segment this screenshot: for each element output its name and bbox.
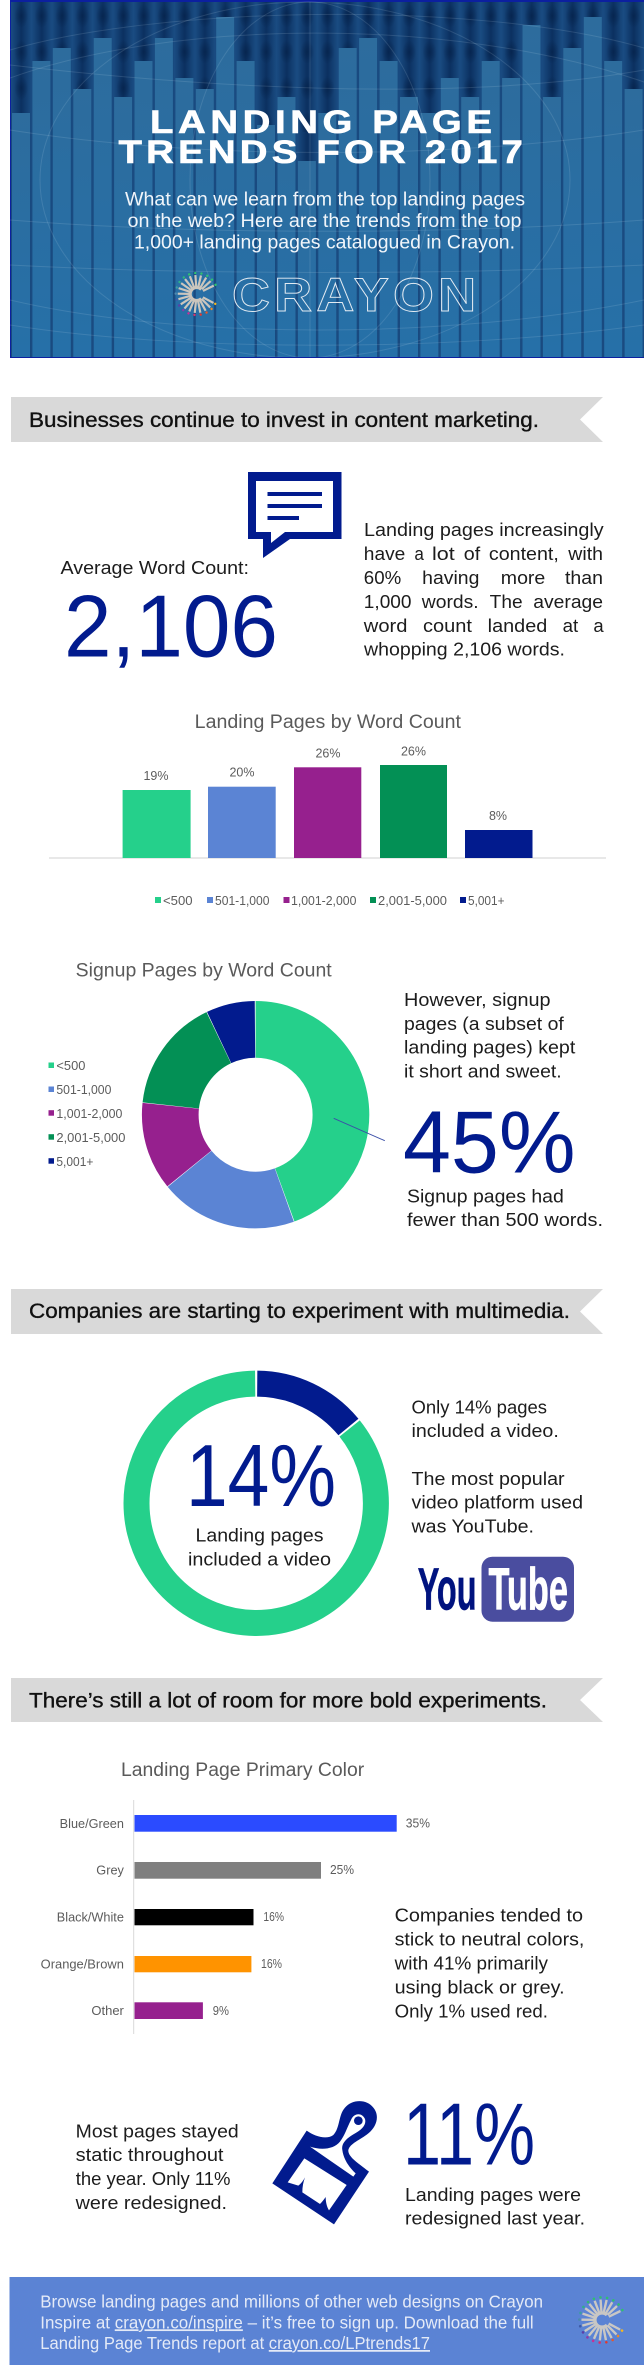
text block: neutral colors: Companies tended to [395,1905,583,1926]
bar: other: 9% [213,2004,229,2018]
icon: YouTube logo: You [418,1556,476,1622]
chart legend: 501-1,000 [215,894,270,908]
bar: 1,001-2,000 [294,747,361,858]
footer text [40,2292,543,2353]
text block: word count explanation: word [363,615,407,636]
chart legend: 1,001-2,000 [291,894,356,908]
section heading: bold experiments: There’s still a lot of room for more bold experiments. [29,1690,547,1712]
chart title: Landing Pages by Word Count [195,712,462,733]
stat: 11 percent [403,2084,585,2229]
icon: paintbrush [272,2101,377,2224]
text block: static pages: the year. Only 11% [76,2168,230,2189]
text block: video: Only 14% pages [412,1396,547,1417]
text block: signup pages: pages (a subset of [404,1013,565,1034]
text block: word count explanation: whopping 2,106 words. [363,638,565,660]
bar: under 500 [123,769,191,858]
donut legend: 5,001+ [56,1155,93,1169]
text block: word count explanation: landed [488,615,547,636]
donut legend: 501-1,000 [56,1083,111,1097]
text block: word count explanation: a [414,543,425,564]
bar: orange/brown: 16% [261,1957,282,1971]
donut segments [170,1029,341,1200]
bar: black/white: 16% [263,1910,284,1924]
ring chart: pages with video [137,1384,376,1623]
section heading: bold experiments [11,1678,603,1722]
bar: 2,001-5,000 [380,745,447,858]
text block: video: The most popular [412,1468,565,1489]
chart legend: 5,001+ [468,894,504,908]
banner title: TRENDS FOR 2017 [118,135,523,170]
ring chart: pages with video: Landing pages [196,1525,324,1546]
text block: word count explanation: having [422,567,479,588]
donut legend: 2,001-5,000 [56,1131,125,1145]
footer text: Landing Page Trends report at crayon.co/LPtrends17 [40,2333,430,2353]
footer panel [10,2277,644,2365]
stat: 45 percent: 45% [403,1093,576,1192]
text block: signup pages: landing pages) kept [404,1036,575,1058]
wordmark: CRAYON [232,269,476,321]
text block: word count explanation [363,519,604,660]
stat: 11 percent: 11% [403,2084,535,2183]
bar chart: landing pages by word count [49,712,606,908]
text block: word count explanation: Landing pages increasingly [364,519,604,540]
banner intro text: What can we learn from the top landing pages [125,190,525,210]
banner title [118,105,523,170]
icon: speech bubble [248,472,342,558]
bar: 501-1,000 [208,766,276,858]
donut chart: signup pages by word count [48,961,385,1200]
text block: word count explanation: 60% [364,567,401,588]
text block: word count explanation: The [490,591,523,612]
icon: footer starburst [578,2296,624,2344]
section heading: multimedia [11,1289,603,1334]
text block: signup pages [404,989,575,1082]
stat: 45 percent [403,1093,603,1230]
bar: other: Other [91,2004,124,2018]
bar: 5,001+: 8% [489,809,507,823]
bar: orange/brown [41,1956,282,1972]
callout line [334,1118,385,1141]
text block: word count explanation: than [565,567,603,588]
text block: word count explanation: content, [489,543,559,564]
stat: 45 percent: Signup pages had [407,1186,564,1206]
text block: static pages: were redesigned. [75,2192,227,2213]
stat: 45 percent: fewer than 500 words. [407,1209,603,1230]
text block: neutral colors: with 41% primarily [394,1953,549,1974]
donut legend: 1,001-2,000 [56,1107,122,1121]
text block: neutral colors: using black or grey. [395,1976,565,1997]
stat: 11 percent: redesigned last year. [405,2208,585,2229]
text block: word count explanation: a [593,615,604,636]
text block: video [410,1396,583,1536]
bar: other [91,2002,229,2019]
bar: grey: 25% [330,1863,354,1877]
text block: video: included a video. [412,1420,559,1441]
bar: blue/green [60,1815,430,1832]
text block: static pages: Most pages stayed [76,2120,239,2141]
bar: black/white [57,1909,284,1925]
icon: Crayon starburst [174,272,217,316]
ring chart: pages with video: included a video [188,1549,331,1570]
text block: word count explanation: have [364,543,405,564]
bar: blue/green: Blue/Green [60,1817,124,1831]
chart title: Signup Pages by Word Count [76,961,332,982]
stat: average word count: 2,106 [64,576,278,676]
footer text: Browse landing pages and millions of other web designs on Crayon [40,2292,543,2312]
text block: static pages [75,2120,239,2213]
donut legend [48,1059,125,1169]
stat: 14 percent: 14% [186,1426,336,1525]
text block: word count explanation: of [464,543,481,564]
stat: 11 percent: Landing pages were [405,2184,581,2205]
donut legend: <500 [56,1059,85,1073]
text block: word count explanation: with [567,543,603,564]
text block: neutral colors: Only 1% used red. [395,2000,548,2021]
text block: word count explanation: 1,000 [364,591,412,612]
bar: 5,001+ [465,809,532,858]
text block: word count explanation: at [563,615,578,636]
text block: word count explanation: more [501,567,545,588]
bar: 2,001-5,000: 26% [401,745,426,759]
text block: word count explanation: words. [421,591,479,612]
bar: under 500: 19% [143,769,169,783]
bar: grey: Grey [96,1864,125,1878]
bar: blue/green: 35% [406,1817,430,1831]
text block: word count explanation: count [423,615,472,636]
chart legend [155,894,504,908]
chart legend: 2,001-5,000 [378,894,447,908]
chart legend: <500 [163,894,193,908]
bar: orange/brown: Orange/Brown [41,1958,124,1972]
icon: YouTube logo [418,1556,574,1622]
banner intro text: on the web? Here are the trends from the top [128,211,522,232]
Crayon logo [174,269,476,321]
header banner [10,0,644,358]
bar chart: landing page primary color [41,1760,430,2034]
text block: static pages: static throughout [76,2144,224,2165]
icon: YouTube logo: Tube [488,1556,568,1622]
text block: signup pages: However, signup [404,989,551,1010]
section heading: content marketing: Businesses continue to invest in content marketing. [29,409,539,432]
section heading: multimedia: Companies are starting to experiment with multimedia. [29,1300,570,1323]
text block: video: was YouTube. [410,1515,534,1536]
footer text: Inspire at crayon.co/inspire – it’s free to sign up. Download the full [40,2312,534,2332]
bar: black/white: Black/White [57,1910,124,1924]
text block: neutral colors: stick to neutral colors, [395,1929,584,1950]
text block: neutral colors [394,1905,584,2021]
text block: video: video platform used [412,1492,583,1513]
section heading: content marketing [11,397,603,442]
banner intro text [125,190,525,254]
stat: average word count: Average Word Count: [60,557,249,578]
text block: word count explanation: average [533,591,603,612]
text block: word count explanation: lot [432,543,455,564]
text block: signup pages: it short and sweet. [404,1060,562,1082]
bar: 501-1,000: 20% [229,766,255,780]
banner intro text: 1,000+ landing pages catalogued in Crayon. [134,232,515,254]
banner bar chart backdrop [12,17,643,358]
chart title: Landing Page Primary Color [121,1760,365,1781]
banner title: LANDING PAGE [150,105,492,140]
bar: 1,001-2,000: 26% [315,747,341,761]
bar: grey [96,1862,354,1879]
